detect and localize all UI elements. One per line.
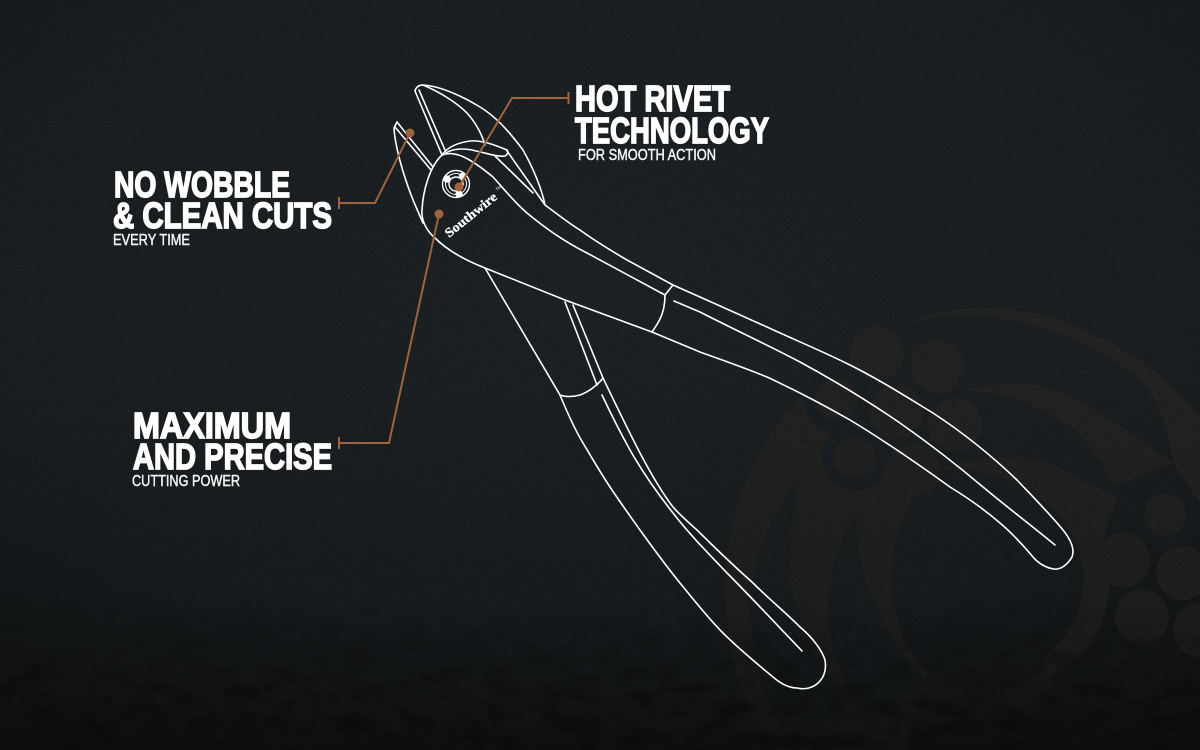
rivet [442, 170, 470, 198]
brand name: Southwire [441, 189, 500, 240]
heading: hot rivet: FOR SMOOTH ACTION [578, 147, 716, 164]
lower handle [560, 378, 825, 689]
callout: no wobble [113, 128, 414, 249]
lower jaw [394, 122, 433, 223]
heading: hot rivet: TECHNOLOGY [575, 110, 769, 151]
heading: maximum: CUTTING POWER [132, 473, 240, 490]
heading: no wobble [113, 164, 332, 249]
heading: no wobble: EVERY TIME [113, 232, 190, 249]
pliers illustration [394, 85, 1073, 689]
watermark logo [725, 308, 1200, 750]
heading: no wobble: & CLEAN CUTS [113, 195, 332, 236]
head and body [422, 154, 673, 332]
callout: maximum [132, 210, 444, 490]
upper handle [652, 285, 1073, 569]
trademark: TM [494, 184, 502, 192]
heading: hot rivet [575, 78, 769, 164]
callout: hot rivet [454, 78, 769, 192]
heading: maximum: MAXIMUM [133, 405, 291, 446]
heading: maximum: AND PRECISE [133, 436, 332, 477]
upper jaw [415, 85, 545, 205]
heading: no wobble: NO WOBBLE [114, 164, 290, 205]
heading: hot rivet: HOT RIVET [575, 78, 730, 119]
lower arm [485, 268, 603, 396]
heading: maximum [132, 405, 332, 490]
